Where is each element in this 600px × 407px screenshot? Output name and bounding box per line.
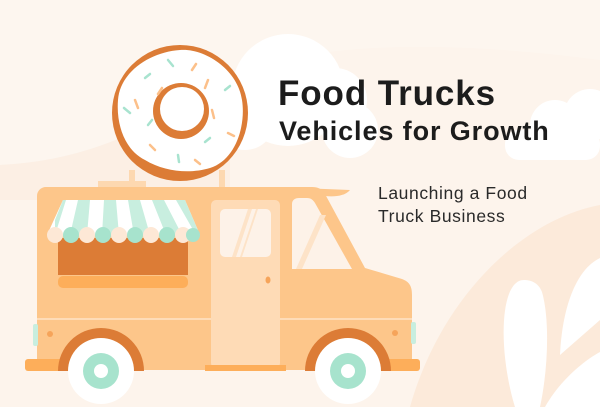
- title: Food Trucks: [278, 74, 496, 113]
- food truck: [25, 181, 420, 404]
- donut sign: [112, 45, 248, 188]
- leaves: [504, 258, 600, 407]
- subtitle heading: Vehicles for Growth: [279, 116, 550, 146]
- tagline text: Truck Business: [378, 206, 505, 226]
- tagline text: [378, 183, 528, 226]
- tagline text: Launching a Food: [378, 183, 528, 203]
- cloud: behind title: [215, 34, 600, 160]
